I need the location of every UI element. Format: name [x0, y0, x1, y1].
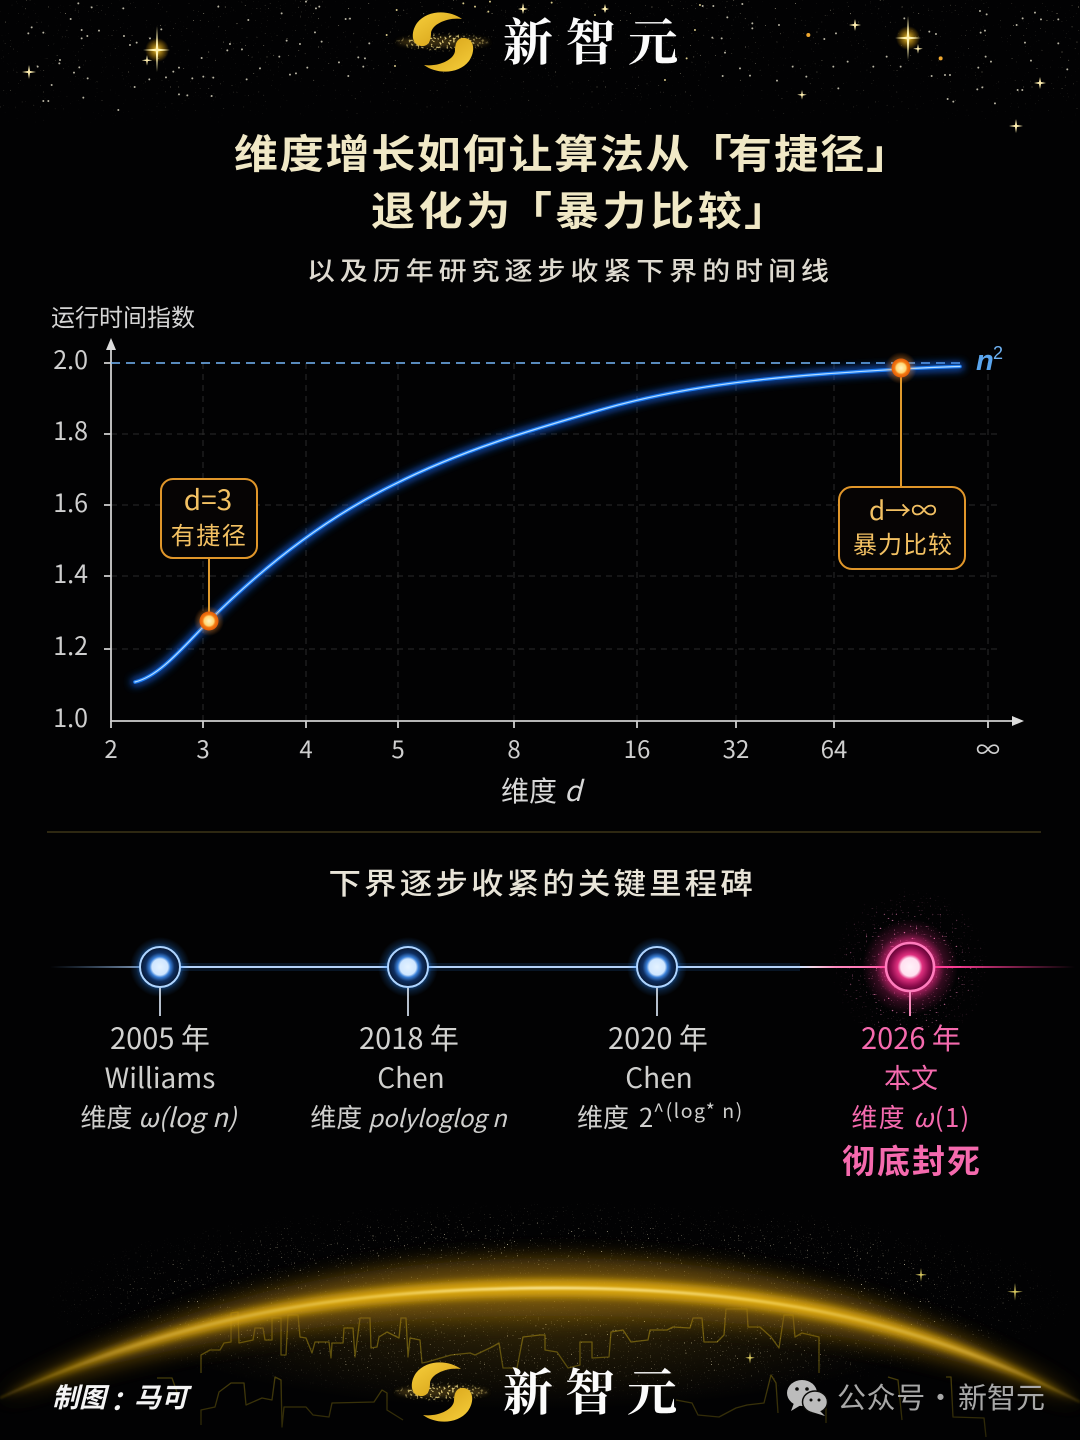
credit: 制图 — [52, 1376, 110, 1415]
x tick labels: 3 — [196, 730, 210, 765]
milestone: 2026 this paper: 彻底封死 — [842, 1135, 982, 1183]
y tick labels: 1.8 — [53, 412, 88, 448]
x tick labels: 4 — [299, 730, 313, 765]
wechat account label: · — [926, 1375, 955, 1417]
credit — [52, 1376, 193, 1418]
milestone: 2026 this paper: 2026 年 — [861, 1016, 961, 1058]
right star dots — [703, 4, 1067, 103]
small sparkle stars — [22, 3, 1046, 133]
milestone: 2018: Chen — [377, 1057, 445, 1097]
milestone: 2018: 2018 年 — [359, 1016, 459, 1058]
milestone: 2026 this paper: 维度 ω(1) — [851, 1098, 971, 1135]
runtime curve — [135, 366, 960, 682]
n squared asymptote: 2 — [993, 343, 1003, 363]
outer glow — [0, 1258, 1080, 1402]
sparkle star right — [895, 16, 921, 60]
callout: d=3 shortcut — [161, 479, 257, 612]
title: 「 — [688, 122, 732, 180]
sparkle star left — [143, 26, 170, 72]
icon: gold crescents — [390, 12, 496, 72]
y axis — [104, 338, 116, 722]
x tick labels: ∞ — [976, 730, 1000, 765]
title: 退化为 — [371, 179, 514, 237]
milestone: 2020: 2020 年 — [608, 1016, 708, 1058]
n squared asymptote — [111, 343, 1003, 377]
logo wordmark: 新智元 — [503, 3, 690, 75]
centre star dots — [387, 2, 700, 80]
timeline — [50, 880, 1075, 1183]
x axis title: 维度 d — [501, 770, 585, 810]
milestone: 2026 this paper — [832, 892, 986, 1176]
callout: d to infinity brute force: d→∞ — [869, 491, 937, 528]
y tick labels: 1.6 — [53, 484, 88, 520]
milestone: 2020: 维度 2 — [577, 1098, 653, 1135]
marker: d to infinity point — [885, 352, 917, 384]
x tick labels: 16 — [624, 730, 650, 765]
timeline axis — [50, 963, 1075, 971]
x axis — [111, 716, 1024, 728]
y axis title: 运行时间指数 — [51, 298, 195, 333]
chart: runtime exponent vs dimension — [51, 298, 1024, 810]
title: 有捷径 — [728, 122, 867, 180]
wechat account label: 公众号 — [837, 1375, 926, 1417]
x tick labels: 64 — [821, 730, 847, 765]
wechat account label — [837, 1375, 1045, 1417]
title: 维度增长如何让算法从 — [234, 122, 691, 180]
n squared asymptote: n — [976, 345, 994, 377]
large amber dots — [808, 35, 941, 58]
milestone: 2005: Williams — [105, 1057, 215, 1097]
core line — [0, 1288, 1080, 1402]
bottom starfield — [52, 1203, 1066, 1398]
left star dots — [28, 2, 369, 110]
y tick labels: 1.0 — [53, 699, 88, 735]
milestone: 2005 — [80, 937, 238, 1135]
top logo — [395, 12, 678, 72]
milestone: 2020 — [577, 937, 744, 1135]
milestone: 2020: ^(log* n) — [653, 1095, 744, 1124]
inner glow — [0, 1279, 1080, 1402]
timeline heading: 下界逐步收紧的关键里程碑 — [329, 860, 756, 903]
subtitle: 以及历年研究逐步收紧下界的时间线 — [307, 251, 834, 288]
callout: d to infinity brute force — [839, 377, 965, 569]
x tick labels: 5 — [391, 730, 405, 765]
x tick labels — [104, 730, 1000, 765]
dome fill — [240, 1297, 842, 1390]
callout: d to infinity brute force: 暴力比较 — [853, 525, 953, 560]
milestone: 2020: Chen — [625, 1057, 693, 1097]
marker: d=3 point — [194, 606, 224, 636]
horizon sparkle stars — [745, 1268, 1023, 1364]
credit: ： — [110, 1379, 137, 1418]
milestone: 2018 — [310, 937, 508, 1135]
milestone: 2005: 2005 年 — [110, 1016, 210, 1058]
top starfield — [0, 0, 1080, 133]
icon: wechat — [787, 1380, 828, 1416]
title: 「 — [508, 179, 552, 237]
credit: 马可 — [134, 1376, 193, 1415]
callout: d=3 shortcut: d=3 — [184, 479, 232, 519]
horizon arc — [0, 1258, 1080, 1402]
callout: d=3 shortcut: 有捷径 — [171, 516, 247, 551]
milestone: 2018: 维度 polyloglog n — [310, 1098, 508, 1135]
city skyline — [157, 1309, 986, 1437]
y tick labels: 2.0 — [53, 341, 88, 377]
x tick labels: 32 — [723, 730, 749, 765]
y tick labels: 1.4 — [53, 555, 88, 591]
y tick labels — [53, 341, 88, 735]
footer logo — [394, 1362, 676, 1422]
logo wordmark: 新智元 — [503, 1353, 689, 1425]
title: 暴力比较 — [555, 179, 745, 237]
icon: gold crescents — [389, 1362, 495, 1422]
footer: glowing horizon — [0, 1203, 1080, 1437]
x tick labels: 8 — [507, 730, 521, 765]
title — [234, 122, 910, 237]
wechat account label: 新智元 — [958, 1375, 1045, 1417]
x tick labels: 2 — [104, 730, 118, 765]
title: 」 — [866, 122, 910, 180]
y tick labels: 1.2 — [53, 627, 88, 663]
grid lines — [111, 363, 1000, 721]
milestone: 2005: 维度 ω(log n) — [80, 1098, 238, 1135]
milestone: 2026 this paper: 本文 — [884, 1057, 938, 1096]
title: 」 — [744, 179, 788, 237]
